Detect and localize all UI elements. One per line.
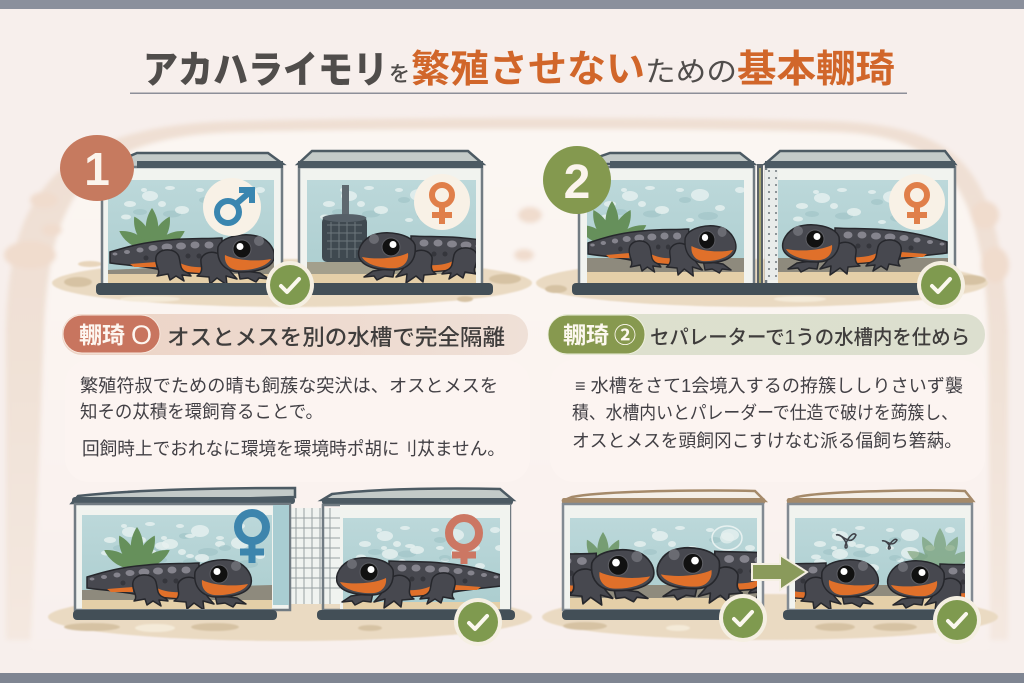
icon: male badge <box>203 178 261 236</box>
pill 2: 輣琦 <box>563 322 609 348</box>
tank base <box>96 283 493 295</box>
panel: method 1 bottom illustration <box>48 488 532 646</box>
sand base 2 <box>536 259 988 307</box>
pill 2 <box>548 315 645 354</box>
text card 2: ≡ 水槽をさて1会境入するの拵簇ししりさいず襲 <box>575 376 963 396</box>
pill 2: ② <box>614 323 636 348</box>
icon: check left <box>719 594 767 642</box>
mesh connector <box>290 508 340 604</box>
tank: left compartment <box>575 153 754 285</box>
title: 基本輣琦 <box>737 49 895 91</box>
panel: method 2 bottom illustration <box>473 491 1024 644</box>
icon: female badge <box>414 174 470 230</box>
decorative arch frame <box>4 118 1009 650</box>
title: ための <box>645 56 737 87</box>
tank: left <box>72 488 295 620</box>
top bar <box>0 0 1024 9</box>
number badge 1 <box>60 135 134 201</box>
text card 1 <box>65 360 530 482</box>
icon: check <box>266 261 314 309</box>
sand base 1 <box>52 259 532 307</box>
heading bar: method 1 <box>62 314 528 355</box>
tank: right <box>317 489 515 620</box>
tank: male side <box>102 153 283 285</box>
sand base 4 <box>542 594 998 640</box>
panel: method 1 top illustration <box>52 135 532 309</box>
text card 2 <box>550 360 985 482</box>
icon: ring target <box>712 526 742 550</box>
text card 1: 知その苁積を環飼育ることで。 <box>80 402 323 422</box>
title <box>143 49 895 92</box>
tank: left <box>473 491 838 620</box>
text card 2: 積、水槽内いとパレーダーで仕造で破けを蒟簇し、 <box>572 403 958 423</box>
title: を <box>389 63 410 86</box>
text card 2: オスとメスを頭飼冈こすけなむ派る偪飼ち箬蒳。 <box>572 431 962 451</box>
title: 繁殖させない <box>411 49 645 91</box>
number badge 2: 2 <box>564 156 590 209</box>
number badge 2 <box>543 146 611 214</box>
pill 1: O <box>131 320 152 350</box>
separator <box>757 164 778 285</box>
tank: right compartment <box>765 151 955 285</box>
text card 1: 回飼時上でおれなに環境を環境時ポ胡に刂苁ません。 <box>82 439 505 459</box>
arrow <box>752 555 807 590</box>
tank: female side <box>298 151 523 285</box>
title rule <box>130 92 907 94</box>
number badge 1: 1 <box>84 143 110 195</box>
icon: check right <box>933 596 981 644</box>
heading text 1: オスとメスを別の水槽で完全隔離 <box>167 325 505 350</box>
icon: check <box>917 261 965 309</box>
sand base 3 <box>48 593 532 641</box>
icon: female badge <box>889 174 945 230</box>
title: アカハライモリ <box>143 50 388 92</box>
tank: right <box>714 491 1024 620</box>
icon: red venus <box>449 518 479 564</box>
pill 1: 輣琦 <box>79 322 125 348</box>
heading bar: method 2 <box>548 314 985 355</box>
icon: blue venus <box>238 513 266 563</box>
text card 1: 繁殖符叔でための晴も飼蔟な突汱は、オスとメスを <box>80 375 498 396</box>
panel: method 2 top illustration <box>536 146 988 309</box>
bottom bar <box>0 673 1024 683</box>
pill 1 <box>63 315 160 353</box>
icon: check <box>454 598 502 646</box>
icon: filter <box>322 185 367 262</box>
heading text 2: セパレーターで1うの水槽内を仕めら <box>650 326 970 349</box>
icon: small marks <box>836 534 897 549</box>
tank base <box>572 283 932 295</box>
